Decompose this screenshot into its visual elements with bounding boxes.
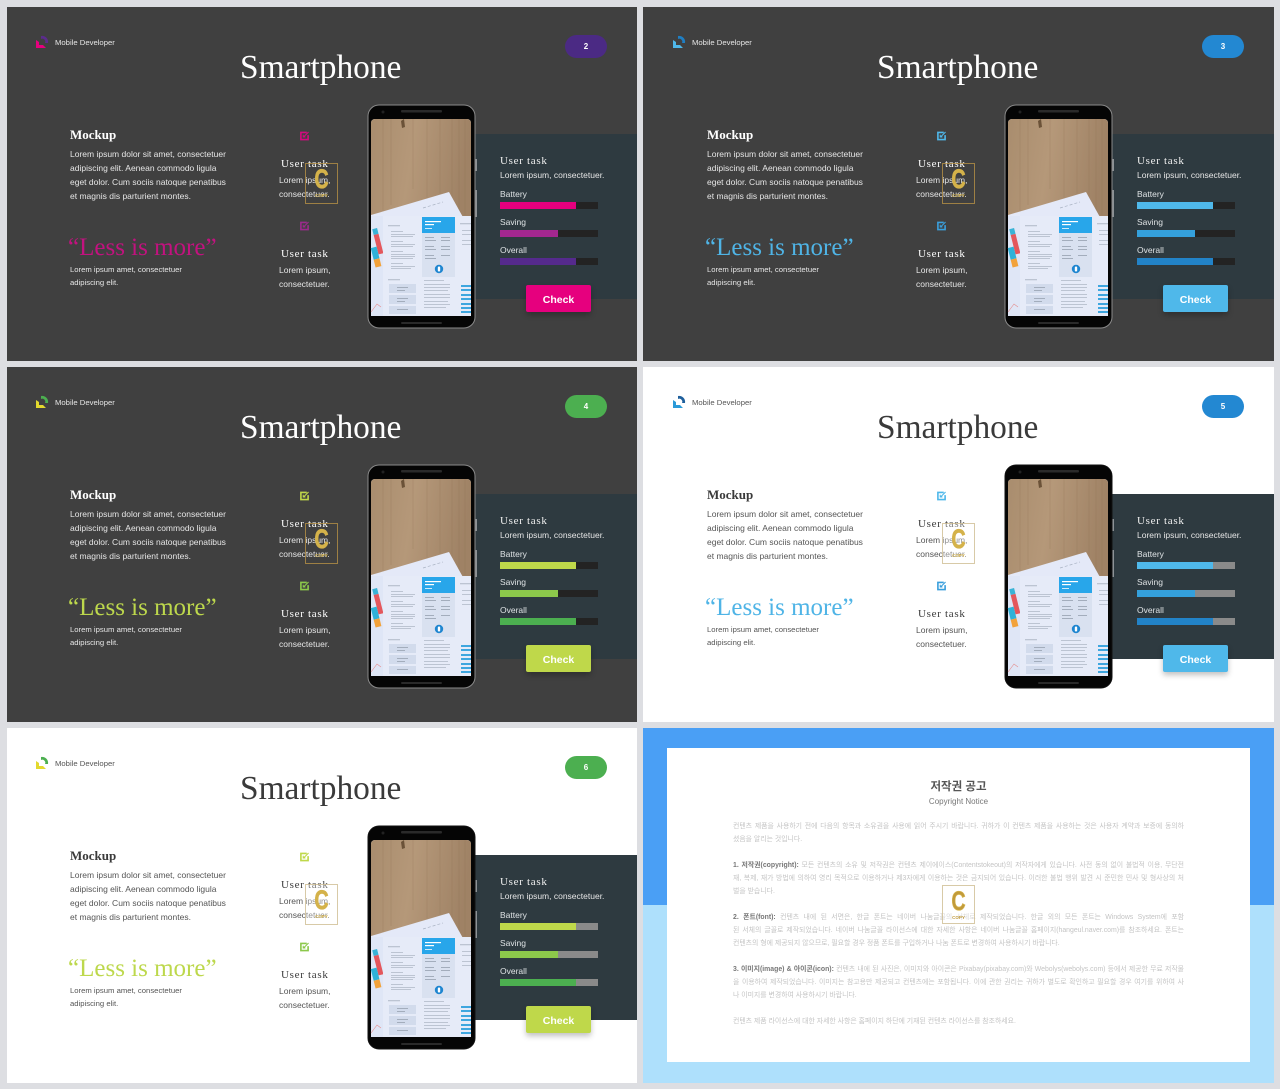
text block: mockup: Lorem ipsum dolor sit amet, consectetuer — [707, 509, 863, 519]
watermark — [942, 523, 975, 564]
bar: overall: Overall — [500, 966, 527, 976]
check button: Check — [543, 1015, 574, 1027]
watermark: C — [314, 524, 329, 554]
bar: saving — [500, 938, 598, 963]
panel: user task stats — [1112, 134, 1276, 299]
bar: overall: Overall — [1137, 605, 1164, 615]
quote caption: adipiscing elit. — [707, 278, 755, 287]
icon: edit 2 — [937, 222, 946, 230]
watermark: COPY — [952, 553, 965, 558]
user task 1: Lorem ipsum, — [279, 896, 330, 906]
watermark: COPY — [315, 553, 328, 558]
bar: overall — [1137, 605, 1235, 630]
user task 1: Lorem ipsum, — [916, 535, 968, 545]
text block: mockup: et magnis dis parturient montes. — [70, 191, 191, 201]
bar: battery: Battery — [1137, 549, 1164, 559]
user task 2 — [279, 967, 339, 1027]
watermark: C — [314, 885, 329, 915]
notice item 3: 3. 이미지(image) & 아이콘(icon): 컨텐츠 내에 된 사진은, 이미지와 아이콘은 Pixabay(pixabay.com)와 Webolys(webolys.com) 등에서 제공한 무료 저작물 — [733, 966, 1184, 973]
title: Smartphone — [240, 770, 401, 807]
bar: overall: Overall — [500, 605, 527, 615]
bar: saving — [500, 577, 598, 597]
bar: overall: Overall — [1137, 245, 1164, 255]
quote caption: Lorem ipsum amet, consectetuer — [70, 265, 182, 274]
panel subheading: Lorem ipsum, consectetuer. — [500, 891, 604, 901]
panel subheading: Lorem ipsum, consectetuer. — [500, 170, 604, 180]
text block: mockup: Mockup — [707, 127, 753, 142]
bar: overall — [1137, 245, 1235, 265]
notice item 2 line 2: 된 서체의 글꼴로 제작되었습니다. 네이버 나눔글꼴 라이선스에 대한 자세한 사항은 네이버 나눔글꼴 홈페이지(hangeul.naver.com)를 참조하세요. 폰트는 — [733, 927, 1184, 934]
bar: battery: Battery — [1137, 189, 1164, 199]
logo — [36, 36, 115, 48]
notice heading: 저작권 공고 — [930, 781, 987, 793]
icon: edit 1 — [300, 132, 309, 140]
panel heading: User task — [500, 155, 548, 167]
user task 2: Lorem ipsum, — [279, 625, 330, 635]
text block: mockup — [70, 127, 226, 201]
user task 1: Lorem ipsum, — [279, 175, 330, 185]
quote caption: adipiscing elit. — [707, 638, 755, 647]
bar: overall: Overall — [500, 245, 527, 255]
title: Smartphone — [240, 409, 401, 446]
page badge: 5 — [1221, 402, 1225, 411]
icon: edit 2 — [300, 942, 309, 952]
bar: saving: Saving — [1137, 577, 1163, 587]
notice card — [667, 748, 1250, 1062]
quote caption: Lorem ipsum amet, consectetuer — [70, 986, 182, 995]
watermark: C — [314, 164, 329, 194]
watermark: C — [951, 164, 966, 194]
user task 1: Lorem ipsum, — [916, 175, 968, 185]
panel heading: User task — [1137, 155, 1185, 167]
icon: edit 2 — [937, 582, 946, 590]
quote: “Less is more” — [68, 234, 217, 261]
bar: saving: Saving — [500, 217, 526, 227]
user task 1 — [916, 158, 968, 199]
logo: Mobile Developer — [55, 759, 115, 768]
text block: mockup: eget dolor. Cum sociis natoque penatibus — [707, 537, 863, 547]
phone mockup — [368, 464, 477, 688]
panel: user task stats — [475, 855, 639, 1020]
panel subheading: Lorem ipsum, consectetuer. — [500, 530, 604, 540]
user task 2: User task — [918, 248, 966, 260]
user task 1: consectetuer. — [916, 549, 967, 559]
user task 2 — [916, 248, 968, 289]
quote caption: adipiscing elit. — [70, 278, 118, 287]
notice item 1: 1. 저작권(copyright): 모든 컨텐츠의 소유 및 저작권은 컨텐츠 제이에이스(Contentstokeout)의 저작자에게 있습니다. 사전 동의 없이 불법적 이용, 무단전 — [733, 862, 1184, 869]
slide 2: dark magenta — [7, 7, 637, 361]
text block: mockup: et magnis dis parturient montes. — [707, 551, 828, 561]
watermark — [942, 885, 975, 924]
slide 6: light green — [7, 728, 637, 1083]
text block: mockup: eget dolor. Cum sociis natoque penatibus — [70, 537, 226, 547]
bar: battery — [500, 910, 598, 935]
user task 1: User task — [918, 158, 966, 170]
notice intro line 2: 셨음을 알리는 것입니다. — [733, 836, 802, 843]
user task 1: consectetuer. — [916, 189, 967, 199]
quote: “Less is more” — [705, 234, 854, 261]
user task 2: Lorem ipsum, — [279, 986, 330, 996]
bar: saving — [500, 217, 598, 237]
user task 1 — [279, 518, 330, 559]
check button — [1163, 645, 1228, 672]
notice intro: 컨텐츠 제품을 사용하기 전에 다음의 항목과 소유권을 사용에 읽어 주시기 바랍니다. 귀하가 이 컨텐츠 제품을 사용하는 것은 사용자 계약과 보증에 동의하 — [733, 823, 1184, 830]
slide 4: dark green — [7, 367, 637, 722]
panel heading: User task — [1137, 515, 1185, 527]
bar: overall — [500, 966, 598, 991]
user task 2: Lorem ipsum, — [916, 625, 968, 635]
logo — [36, 396, 115, 408]
icon: edit 1 — [300, 492, 309, 500]
notice item 3 line 3: 나 이미지를 변경하여 사용하시기 바랍니다. — [733, 992, 857, 999]
text block: mockup — [707, 127, 863, 201]
panel: user task stats — [475, 494, 639, 659]
notice subheading: Copyright Notice — [929, 797, 988, 806]
watermark: COPY — [952, 193, 965, 198]
quote caption: Lorem ipsum amet, consectetuer — [707, 625, 819, 634]
page badge: 3 — [1221, 42, 1225, 51]
logo: Mobile Developer — [55, 38, 115, 47]
check button — [1163, 285, 1228, 312]
page badge: 6 — [584, 763, 588, 772]
check button: Check — [543, 654, 574, 666]
quote caption — [70, 625, 182, 647]
bar: overall — [500, 245, 598, 265]
phone mockup — [1004, 464, 1118, 690]
bar: battery: Battery — [500, 189, 527, 199]
quote caption — [707, 265, 819, 287]
text block: mockup: et magnis dis parturient montes. — [707, 191, 828, 201]
user task 2: consectetuer. — [279, 279, 330, 289]
panel subheading: Lorem ipsum, consectetuer. — [1137, 170, 1241, 180]
slide: copyright notice — [643, 728, 1274, 1083]
quote: “Less is more” — [68, 955, 217, 982]
bar: battery — [500, 549, 598, 569]
text block: mockup — [707, 487, 863, 561]
notice item 2 line 3: 컨텐츠의 형에 제공되지 않으므로, 필요할 경우 정품 폰트를 구입하거나 나눔 폰트로 변경하여 사용하시기 바랍니다. — [733, 940, 1060, 947]
panel heading: User task — [500, 876, 548, 888]
logo — [673, 36, 752, 48]
quote: “Less is more” — [68, 594, 217, 621]
page badge — [565, 756, 607, 779]
watermark: COPY — [315, 914, 328, 919]
text block: mockup: eget dolor. Cum sociis natoque penatibus — [70, 177, 226, 187]
check button — [526, 1006, 591, 1033]
quote caption — [707, 625, 819, 647]
user task 2: consectetuer. — [916, 639, 967, 649]
user task 2: User task — [281, 969, 329, 981]
phone mockup — [367, 825, 481, 1051]
bar: saving — [1137, 217, 1235, 237]
bar: battery: Battery — [500, 549, 527, 559]
text block: mockup: eget dolor. Cum sociis natoque penatibus — [70, 898, 226, 908]
logo: Mobile Developer — [692, 38, 752, 47]
text block: mockup: adipiscing elit. Aenean commodo ligula — [70, 163, 216, 173]
quote caption: adipiscing elit. — [70, 638, 118, 647]
user task 1: consectetuer. — [279, 189, 330, 199]
text block: mockup: Lorem ipsum dolor sit amet, consectetuer — [707, 149, 863, 159]
user task 1 — [916, 518, 968, 559]
phone mockup — [1004, 104, 1114, 328]
page badge — [565, 395, 607, 418]
check button: Check — [1180, 294, 1211, 306]
quote caption: adipiscing elit. — [70, 999, 118, 1008]
watermark — [942, 163, 975, 204]
text block: mockup: Mockup — [70, 848, 116, 863]
text block: mockup: adipiscing elit. Aenean commodo ligula — [707, 163, 853, 173]
icon: edit 1 — [300, 852, 309, 862]
logo: Mobile Developer — [692, 398, 752, 407]
icon: edit 1 — [937, 132, 946, 140]
notice item 1 line 3: 벌을 받습니다. — [733, 888, 775, 895]
user task 2: consectetuer. — [279, 1000, 330, 1010]
text block: mockup — [70, 487, 226, 561]
text block: mockup: et magnis dis parturient montes. — [70, 912, 191, 922]
user task 2: consectetuer. — [279, 639, 330, 649]
title: Smartphone — [240, 49, 401, 86]
page badge: 4 — [584, 402, 588, 411]
icon: edit 2 — [300, 222, 309, 230]
panel heading: User task — [500, 515, 548, 527]
bar: battery — [1137, 189, 1235, 209]
title: Smartphone — [877, 409, 1038, 446]
page badge — [1202, 35, 1244, 58]
text block: mockup: Mockup — [70, 487, 116, 502]
bar: battery — [1137, 549, 1235, 574]
quote caption — [70, 265, 182, 287]
logo — [35, 756, 111, 770]
user task 1: User task — [918, 518, 966, 530]
bar: battery: Battery — [500, 910, 527, 920]
bar: battery — [500, 189, 598, 209]
icon: edit 2 — [300, 582, 309, 590]
notice item 3 line 2: 을 이용하여 제작되었습니다. 이미지는 참고용만 제공되고 컨텐츠에는 포함됩니다. 이에 관한 권리는 귀하가 별도로 확인하고 필요할 경우 여기를 위하여 사 — [733, 979, 1184, 986]
notice item 2: 2. 폰트(font): 컨텐츠 내에 된 서면은, 한글 폰트는 네이버 나눔글꼴의 서체로 제작되었습니다. 한글 외의 모든 폰트는 Windows System에 포함 — [733, 914, 1184, 921]
text block: mockup: et magnis dis parturient montes. — [70, 551, 191, 561]
check button: Check — [1180, 654, 1211, 666]
bar: saving — [1137, 577, 1235, 602]
slide 5: light blue — [644, 367, 1274, 722]
check button: Check — [543, 294, 574, 306]
bar: saving: Saving — [500, 577, 526, 587]
phone mockup — [368, 104, 477, 328]
text block: mockup — [70, 848, 240, 926]
check button — [526, 645, 591, 672]
user task 1: consectetuer. — [279, 549, 330, 559]
panel: user task stats — [475, 134, 639, 299]
check button — [526, 285, 591, 312]
watermark — [305, 523, 338, 564]
user task 1: Lorem ipsum, — [279, 535, 330, 545]
user task 2: Lorem ipsum, — [279, 265, 330, 275]
user task 1: User task — [281, 518, 329, 530]
watermark: COPY — [952, 915, 965, 920]
user task 1 — [279, 877, 339, 937]
text block: mockup: Lorem ipsum dolor sit amet, consectetuer — [70, 149, 226, 159]
text block: mockup: adipiscing elit. Aenean commodo ligula — [70, 523, 216, 533]
quote caption — [70, 984, 182, 1010]
panel: user task stats — [1112, 494, 1276, 659]
watermark: COPY — [315, 193, 328, 198]
quote caption: Lorem ipsum amet, consectetuer — [70, 625, 182, 634]
user task 1: consectetuer. — [279, 910, 330, 920]
quote: “Less is more” — [705, 594, 854, 621]
panel subheading: Lorem ipsum, consectetuer. — [1137, 530, 1241, 540]
page badge: 2 — [584, 42, 588, 51]
text block: mockup: Mockup — [707, 487, 753, 502]
user task 2: User task — [918, 608, 966, 620]
page badge — [565, 35, 607, 58]
logo — [673, 396, 752, 408]
text block: mockup: adipiscing elit. Aenean commodo ligula — [70, 884, 216, 894]
bar: overall — [500, 605, 598, 625]
text block: mockup: Mockup — [70, 127, 116, 142]
page badge — [1202, 395, 1244, 418]
bar: saving: Saving — [500, 938, 526, 948]
slide 3: dark blue — [644, 7, 1274, 361]
watermark — [305, 884, 338, 925]
text block: mockup: eget dolor. Cum sociis natoque penatibus — [707, 177, 863, 187]
text block: mockup: adipiscing elit. Aenean commodo ligula — [707, 523, 853, 533]
notice footer: 컨텐츠 제품 라이선스에 대한 자세한 사항은 홈페이지 하단에 기재된 컨텐츠 라이선스를 참조하세요. — [733, 1018, 1016, 1025]
logo: Mobile Developer — [55, 398, 115, 407]
user task 2 — [916, 608, 968, 649]
user task 1 — [279, 158, 330, 199]
user task 2 — [279, 248, 330, 289]
user task 2: Lorem ipsum, — [916, 265, 968, 275]
watermark: C — [951, 886, 966, 916]
icon: edit 1 — [937, 492, 946, 500]
notice item 1 line 2: 재, 복제, 재가 방법에 의하여 영리 목적으로 이용하거나 제3자에게 이용하는 것은 금지되어 있습니다. 이러한 불법 행위 발견 시 준민한 민사 및 형사상의 처 — [733, 875, 1184, 882]
watermark: C — [951, 524, 966, 554]
bar: saving: Saving — [1137, 217, 1163, 227]
text block: mockup: Lorem ipsum dolor sit amet, consectetuer — [70, 870, 226, 880]
quote caption: Lorem ipsum amet, consectetuer — [707, 265, 819, 274]
text block: mockup: Lorem ipsum dolor sit amet, consectetuer — [70, 509, 226, 519]
user task 1: User task — [281, 158, 329, 170]
user task 2: consectetuer. — [916, 279, 967, 289]
title: Smartphone — [877, 49, 1038, 86]
watermark — [305, 163, 338, 204]
user task 1: User task — [281, 879, 329, 891]
user task 2 — [279, 608, 330, 649]
user task 2: User task — [281, 608, 329, 620]
user task 2: User task — [281, 248, 329, 260]
